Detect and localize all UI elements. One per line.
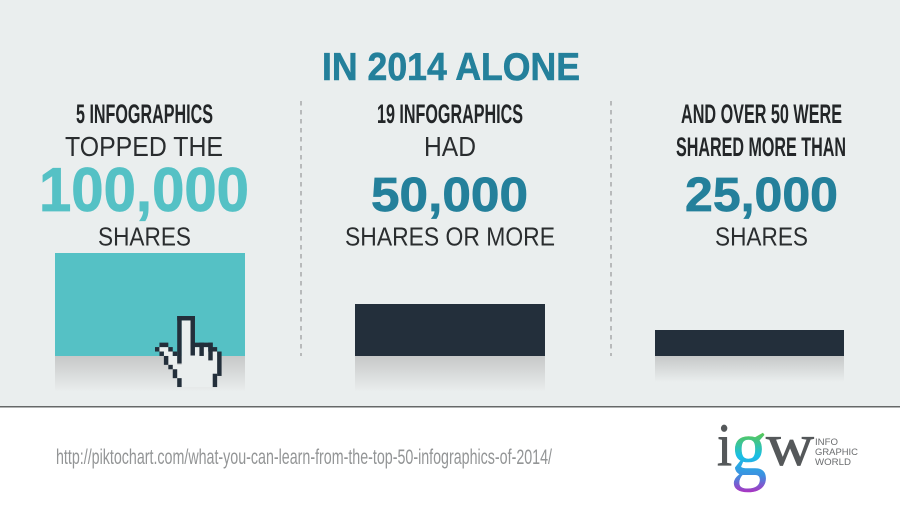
panel: 100,000 shares — [39, 99, 249, 392]
logo: igw: WORLD — [815, 457, 851, 468]
bar: 100,000 — [55, 253, 245, 356]
source url: http://piktochart.com/what-you-can-learn-from-the-top-50-infographics-of-2014/ — [56, 446, 552, 469]
text: shares: SHARES — [715, 222, 808, 252]
text: shares or more: SHARES OR MORE — [345, 222, 555, 252]
logo: igw: g — [731, 405, 767, 493]
icon: pointer hand — [155, 316, 222, 387]
panel: 25,000 shares — [655, 99, 846, 382]
panel: 50,000 shares — [345, 99, 555, 392]
number: 100,000: 100,000 — [39, 156, 249, 225]
number: 50,000: 50,000 — [371, 169, 528, 222]
bar reflection — [655, 356, 844, 382]
bar: 50,000 — [355, 304, 545, 356]
number: 25,000: 25,000 — [685, 169, 838, 222]
text: 5 infographics: 5 INFOGRAPHICS — [76, 99, 213, 129]
title: IN 2014 ALONE — [322, 46, 580, 89]
logo: igw: INFO — [815, 437, 838, 448]
text: had: HAD — [424, 131, 476, 162]
logo: igw — [717, 405, 858, 493]
bar reflection — [355, 356, 545, 392]
text: 19 infographics: 19 INFOGRAPHICS — [377, 99, 523, 129]
logo: igw: GRAPHIC — [815, 447, 858, 458]
bar reflection — [55, 356, 245, 392]
bar: 25,000 — [655, 330, 844, 356]
text: topped the: TOPPED THE — [65, 131, 223, 162]
text: shares: SHARES — [98, 222, 191, 252]
logo: igw: w — [766, 412, 815, 478]
logo: igw: i — [717, 412, 732, 478]
background panel — [0, 0, 900, 406]
